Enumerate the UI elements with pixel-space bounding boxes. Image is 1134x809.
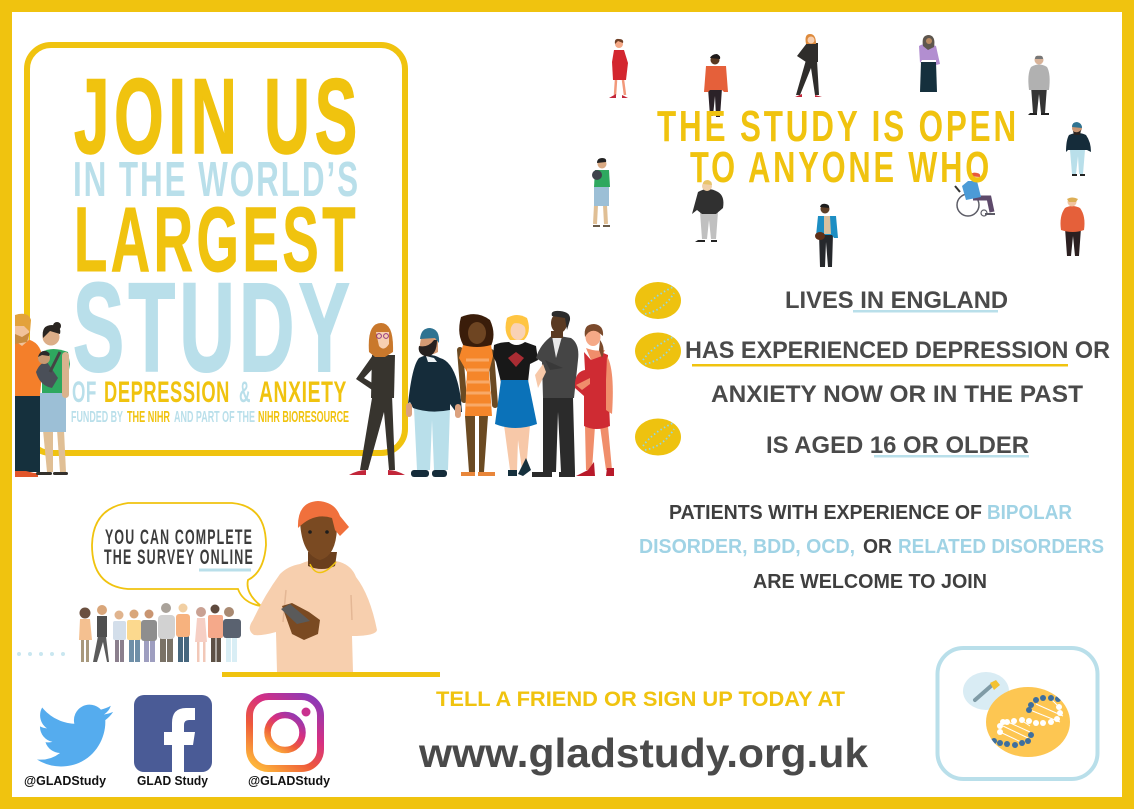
icon: twitter <box>37 705 113 766</box>
heading: largest: LARGEST <box>74 189 359 291</box>
icon: sample tube <box>963 672 1009 710</box>
heading: to anyone who: TO ANYONE WHO <box>690 143 992 192</box>
panel: study open text and small people <box>592 34 1091 267</box>
text block: patients welcome: DISORDER, BDD, OCD, <box>639 535 855 558</box>
person: man in orange jumper <box>15 314 43 477</box>
small person: woman in blue jacket <box>815 204 838 267</box>
funding line <box>71 409 349 426</box>
icon: instagram <box>250 696 320 768</box>
text block: patients welcome: ARE WELCOME TO JOIN <box>753 570 987 593</box>
heading: join us: JOIN US <box>74 56 362 176</box>
criterion: has experienced depression <box>685 337 1110 408</box>
funding line: THE NIHR <box>127 409 170 426</box>
neck and chain <box>308 552 337 569</box>
criterion: lives in england: LIVES IN ENGLAND <box>785 287 1008 314</box>
heading: study: STUDY <box>73 257 354 398</box>
small person: woman with glasses <box>795 34 822 97</box>
speech bubble: complete the survey online: THE SURVEY ONLINE <box>104 546 254 569</box>
person in queue 8 <box>195 607 207 662</box>
person in queue 4 <box>127 610 141 662</box>
label: instagram handle: @GLADStudy <box>248 774 330 788</box>
person: man with turban <box>406 328 462 477</box>
bullet icon: dna oval 3 <box>635 418 681 456</box>
small person: man with turban <box>1066 122 1091 176</box>
small person: man in orange top <box>1060 198 1084 256</box>
panel: join us headline <box>27 45 405 453</box>
person in queue 1 <box>79 608 92 662</box>
person: woman with glasses <box>349 323 405 475</box>
divider bar <box>222 672 440 677</box>
person: man in grey suit <box>532 311 578 477</box>
hand and phone <box>282 603 320 640</box>
small person: man in grey top <box>1028 56 1050 115</box>
person in queue 3 <box>113 610 126 662</box>
person in queue 7 <box>176 604 190 662</box>
icon: facebook <box>134 695 212 772</box>
small person: woman in hijab <box>919 35 940 92</box>
text block: patients welcome <box>639 501 1104 593</box>
small person: blond man in black top <box>692 180 723 242</box>
funding line: NIHR BIORESOURCE <box>258 409 349 426</box>
person: woman in blue skirt <box>493 315 538 476</box>
bullet icon: dna oval 2 <box>635 332 681 370</box>
person in queue 10 <box>223 607 241 662</box>
criterion: aged 16 or older: IS AGED 16 OR OLDER <box>766 432 1029 459</box>
criterion: has experienced depression: ANXIETY NOW OR IN THE PAST <box>711 381 1083 408</box>
bullet icon: dna oval 1 <box>635 282 681 319</box>
icon: dna oval <box>986 687 1070 757</box>
face <box>300 505 337 560</box>
headline frame <box>27 45 405 453</box>
logo frame <box>938 648 1098 779</box>
text block: patients welcome: OR <box>863 535 892 558</box>
person: pregnant woman in red dress <box>575 324 614 476</box>
subheading: of depression and anxiety: & <box>239 376 251 409</box>
subheading: of depression and anxiety: OF <box>72 376 97 409</box>
small person: man in plaid shirt <box>704 54 728 117</box>
person in queue 2 <box>93 605 109 662</box>
funding line: FUNDED BY <box>71 409 123 426</box>
panel: eligibility criteria <box>635 282 1110 593</box>
hoodie <box>250 559 377 672</box>
small person: wheelchair user <box>955 172 995 216</box>
label: facebook name: GLAD Study <box>137 774 208 788</box>
speech bubble: complete the survey online: YOU CAN COMPLETE <box>105 526 253 549</box>
speech bubble: complete the survey online <box>92 503 266 606</box>
person in queue 9 <box>208 604 223 662</box>
logo: glad dna badge <box>938 648 1098 779</box>
person in queue 5 <box>141 610 157 662</box>
person: woman in green with baby <box>36 322 70 475</box>
subheading: of depression and anxiety: ANXIETY <box>259 376 347 409</box>
social media <box>24 695 330 788</box>
text block: patients welcome: RELATED DISORDERS <box>898 535 1104 558</box>
text block: patients welcome: BIPOLAR <box>987 501 1072 524</box>
label: twitter handle: @GLADStudy <box>24 774 106 788</box>
illustration: faded queue of people <box>17 603 241 662</box>
text: tell a friend: TELL A FRIEND OR SIGN UP TODAY AT <box>436 688 845 711</box>
small person: pregnant woman <box>609 39 628 98</box>
small person: parent carrying baby <box>592 158 610 227</box>
heading: in the world's: IN THE WORLD’S <box>73 153 360 207</box>
person in queue 6 <box>158 603 175 662</box>
criterion: has experienced depression: HAS EXPERIENCED DEPRESSION OR <box>685 337 1110 364</box>
cap <box>298 501 349 536</box>
illustration: large group of people <box>15 311 614 477</box>
text block: patients welcome: PATIENTS WITH EXPERIENCE OF <box>669 501 982 524</box>
funding line: AND PART OF THE <box>174 409 255 426</box>
text: website url: www.gladstudy.org.uk <box>418 730 868 776</box>
person: woman in striped dress <box>459 314 495 476</box>
subheading: of depression and anxiety: DEPRESSION <box>104 376 230 409</box>
illustration: man using phone <box>250 501 377 672</box>
call to action <box>418 688 868 776</box>
progress dots <box>17 652 65 656</box>
